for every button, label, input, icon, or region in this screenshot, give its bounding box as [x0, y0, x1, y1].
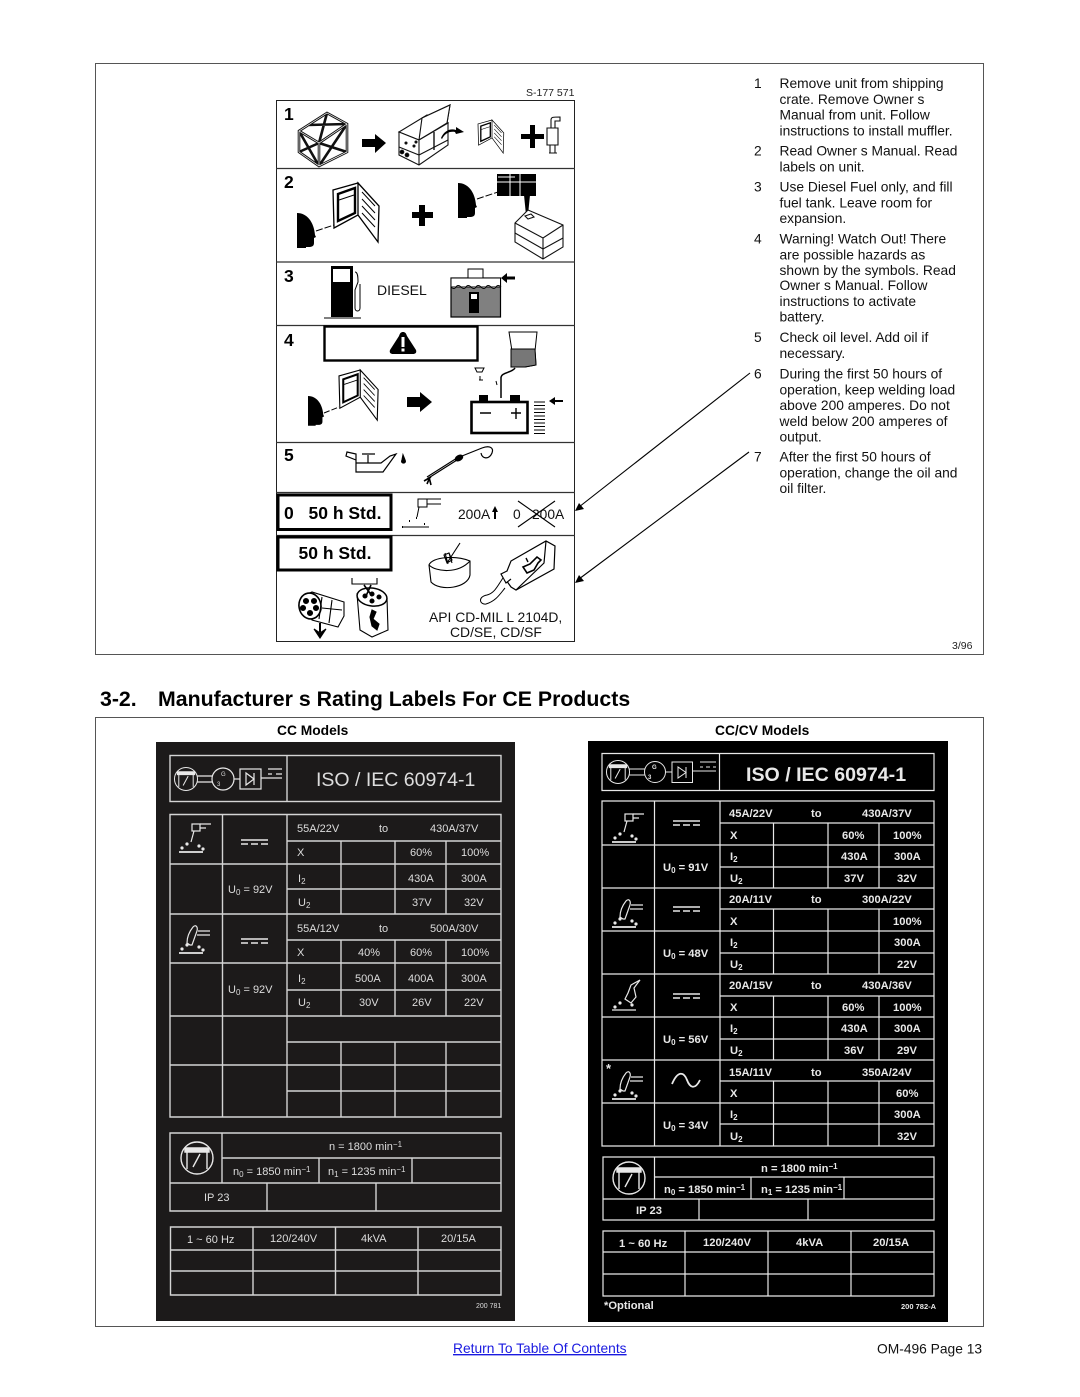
welding data table: 37V [412, 897, 432, 909]
welding data table: 15A/11V [729, 1067, 772, 1079]
welding data table: 0 [671, 1124, 676, 1133]
power supply box: 20/15A [441, 1233, 477, 1245]
welding data table: 100% [461, 947, 489, 959]
power supply box: 20/15A [873, 1237, 909, 1249]
welding data table: 60% [896, 1088, 918, 1100]
welding data table: U [663, 948, 671, 960]
engine speed box: −1 [833, 1183, 843, 1192]
welding data table: U [298, 897, 306, 909]
power supply box: 1 ~ 60 Hz [619, 1238, 668, 1250]
icon: reader head [308, 396, 324, 426]
welding data table: 100% [893, 916, 922, 928]
icon: plus [521, 125, 544, 148]
step 4 pictograms [284, 326, 563, 434]
arrow: step 6 leader [575, 373, 750, 511]
icon: plus [412, 205, 433, 226]
welding data table: 430A/37V [862, 808, 912, 820]
icon: open box unit [399, 105, 450, 165]
welding data table: 2 [738, 963, 743, 972]
welding data table: 300A/22V [862, 894, 912, 906]
text block: numbered steps: Check oil level. Add oil if [780, 330, 928, 345]
icon: engine generator rectifier symbol: G [221, 772, 226, 778]
welding data table: 430A [408, 873, 434, 885]
welding data table: 60% [410, 847, 432, 859]
step 2 pictograms [284, 172, 563, 259]
icon: labels on unit [497, 174, 536, 196]
icon: fuel filter installed [352, 578, 388, 637]
icon: engine generator rectifier symbol: G [652, 765, 657, 771]
step 1 pictograms [284, 104, 560, 166]
welding data table: I [730, 1109, 733, 1121]
welding data table: 430A [841, 1023, 868, 1035]
panel: pictorial instruction table [276, 100, 575, 642]
text block: numbered steps: 5 [754, 330, 762, 345]
welding data table: = 91V [676, 862, 709, 874]
engine speed box: −1 [396, 1165, 406, 1174]
engine speed box: n = 1800 min [761, 1163, 828, 1175]
welding data table: 37V [844, 873, 864, 885]
engine speed box: −1 [828, 1162, 838, 1171]
welding data table: * [606, 1061, 612, 1076]
text block: numbered steps: 7 [754, 450, 762, 464]
header box [170, 755, 501, 802]
welding data table: 300A [894, 1023, 921, 1035]
welding data table: to [379, 823, 388, 835]
step 5 pictograms: 5 [284, 445, 294, 465]
welding data table: = 48V [676, 948, 709, 960]
power supply box: 4kVA [361, 1233, 387, 1245]
welding data table: U [730, 959, 738, 971]
welding data table: 2 [738, 877, 743, 886]
box: 50 h standard [278, 537, 391, 570]
welding data table: 2 [733, 1027, 738, 1036]
text block: numbered steps: instructions to install muffler. [780, 123, 953, 138]
icon: oil can [346, 452, 405, 472]
text block: numbered steps: output. [780, 430, 822, 444]
welding data table: 55A/12V [297, 923, 340, 935]
engine speed box [603, 1157, 934, 1220]
panel: CC models rating label [156, 742, 515, 1321]
part number: 200 782-A [901, 1302, 937, 1311]
welding data table: = 92V [240, 884, 273, 896]
icon: electrolyte bag [475, 332, 537, 398]
text: 0 to 200A crossed out: 0 [513, 507, 521, 522]
text block: numbered steps: Use Diesel Fuel only, and fill [780, 180, 953, 194]
power supply box [603, 1231, 934, 1296]
welding data table: X [297, 847, 305, 859]
engine speed box: n [761, 1184, 768, 1196]
welding data table: 100% [893, 830, 922, 842]
welding data table: 32V [897, 1131, 917, 1143]
welding data table: 300A [461, 973, 487, 985]
engine speed box: −1 [393, 1140, 403, 1149]
welding data table: I [730, 1023, 733, 1035]
engine speed box: = 1235 min [339, 1166, 396, 1178]
engine speed box: 0 [239, 1170, 244, 1179]
text block: numbered steps: weld below 200 amperes of [778, 414, 948, 429]
step 6 first 50 hours pictograms: 0 [284, 503, 294, 523]
engine speed box: −1 [736, 1183, 746, 1192]
welding data table: 350A/24V [862, 1067, 912, 1079]
welding data table: X [730, 1088, 738, 1100]
icon: arrow [407, 392, 432, 412]
welding data table: U [730, 1131, 738, 1143]
text block: numbered steps: necessary. [780, 346, 845, 361]
welding data table: 29V [897, 1045, 917, 1057]
engine speed box: 1 [334, 1170, 339, 1179]
step 3 pictograms: 3 [284, 266, 294, 286]
heading: section 3-2: 3-2. [100, 687, 137, 711]
welding data table: U [228, 984, 236, 996]
power supply box: 120/240V [703, 1237, 751, 1249]
welding data table: 430A/37V [430, 823, 479, 835]
icon: reader head two [458, 183, 477, 218]
text: 0 to 200A crossed out [513, 501, 565, 527]
welding data table: 500A [355, 973, 381, 985]
arrow: step 7 leader [575, 452, 749, 583]
text block: numbered steps: During the first 50 hours of [780, 366, 942, 382]
icon: muffler [547, 117, 560, 153]
text block: numbered steps: instructions to activate [780, 294, 916, 309]
text block: numbered steps: Read Owner s Manual. Read [780, 144, 957, 158]
welding data table: 0 [671, 1038, 676, 1047]
icon: engine generator rectifier symbol [174, 767, 282, 791]
engine speed box: n [328, 1166, 334, 1178]
heading: section 3-2: Manufacturer s Rating Labels For CE Products [158, 687, 630, 711]
optional footnote: *Optional [604, 1300, 654, 1312]
text block: numbered steps: 3 [754, 180, 762, 194]
header box: ISO / IEC 60974-1 [746, 764, 906, 786]
welding data table: I [730, 937, 733, 949]
welding data table: 36V [844, 1045, 864, 1057]
engine speed box: 1 [768, 1188, 773, 1197]
welding data table: 30V [359, 997, 379, 1009]
welding data table: U [730, 873, 738, 885]
welding data table: 2 [733, 1113, 738, 1122]
icon: warning triangle [390, 332, 416, 354]
text block: numbered steps: Remove unit from shipping [780, 76, 944, 91]
icon: fuel pump [324, 266, 361, 318]
text block: numbered steps: are possible hazards as [780, 247, 925, 262]
welding data table: X [730, 830, 738, 842]
step 1 pictograms: 1 [284, 104, 294, 124]
icon: manual [339, 370, 378, 420]
welding data table: 300A [894, 937, 921, 949]
welding data table: 2 [738, 1135, 743, 1144]
page number: OM-496 Page 13 [877, 1342, 982, 1356]
power supply box: 1 ~ 60 Hz [187, 1234, 234, 1246]
icon: manual [478, 120, 504, 153]
step 3 pictograms [284, 266, 515, 318]
text block: numbered steps: labels on unit. [780, 159, 865, 174]
icon: arrow [362, 134, 386, 153]
engine speed box: n [664, 1184, 671, 1196]
text block: numbered steps: 6 [754, 366, 762, 382]
welding data table: U [663, 1034, 671, 1046]
step 6 first 50 hours pictograms: 50 h Std. [308, 503, 381, 523]
welding data table: 22V [897, 959, 917, 971]
text block: numbered steps: 1 [754, 76, 762, 91]
engine speed box: IP 23 [204, 1192, 230, 1204]
welding data table: U [730, 1045, 738, 1057]
icon: welding torch [402, 499, 441, 527]
welding data table: 2 [301, 877, 306, 886]
welding data table: 100% [893, 1002, 922, 1014]
welding data table: X [730, 916, 738, 928]
welding data table: I [298, 873, 301, 885]
icon: crate [299, 113, 347, 166]
welding data table: 2 [733, 855, 738, 864]
box: 0 to 50 h standard [278, 495, 391, 530]
welding data table: 32V [464, 897, 484, 909]
step 7 first 50 hours pictograms: 50 h Std. [298, 543, 371, 563]
icon: manual [333, 183, 379, 242]
text block: numbered steps: Owner s Manual. Follow [780, 278, 928, 293]
step 4 pictograms: 4 [284, 330, 294, 350]
power supply box [170, 1227, 501, 1295]
welding data table: 430A/36V [862, 980, 912, 992]
welding data table: 20A/11V [729, 894, 772, 906]
oil specification: API CD-MIL L 2104D, [429, 609, 562, 625]
text block: numbered steps: battery. [780, 310, 824, 325]
welding data table: 26V [412, 997, 432, 1009]
text block: numbered steps: crate. Remove Owner s [780, 92, 925, 107]
step 7 first 50 hours pictograms [278, 537, 562, 640]
welding data table: = 92V [240, 984, 273, 996]
warning banner [324, 326, 478, 360]
date code: 3/96 [952, 640, 973, 652]
icon: fuel tank [451, 269, 515, 317]
welding data table: U [663, 1120, 671, 1132]
text block: numbered steps: oil filter. [780, 481, 826, 496]
icon: engine generator rectifier symbol: 3 [648, 775, 652, 781]
welding data table: 40% [358, 947, 380, 959]
engine speed box: IP 23 [636, 1205, 662, 1217]
text block: numbered steps: fuel tank. Leave room for [780, 195, 933, 210]
panel: CE rating labels frame [96, 718, 984, 1326]
header box: ISO / IEC 60974-1 [316, 769, 475, 791]
step 6 first 50 hours pictograms [278, 495, 565, 530]
icon: dipstick [424, 447, 493, 485]
text: 200A minimum: 200A [458, 507, 491, 522]
welding data table: 32V [897, 873, 917, 885]
welding data table: X [297, 947, 305, 959]
engine speed box: n = 1800 min [329, 1141, 393, 1153]
text block: numbered steps: Warning! Watch Out! There [780, 232, 946, 246]
power supply box: 4kVA [796, 1237, 823, 1249]
part number: 200 781 [476, 1303, 501, 1310]
power supply box: 120/240V [270, 1233, 318, 1245]
engine speed box: 0 [671, 1188, 676, 1197]
icon: fuel filter removed [297, 591, 344, 638]
welding data table: I [730, 851, 733, 863]
text block: numbered steps: above 200 amperes. Do not [780, 398, 950, 413]
text block: numbered steps: expansion. [780, 211, 846, 226]
welding data table: 100% [461, 847, 489, 859]
welding data table: 60% [842, 830, 864, 842]
welding data table: 45A/22V [729, 808, 773, 820]
welding data table: U [298, 997, 306, 1009]
link: return to table of contents: Return To Table Of Contents [453, 1341, 627, 1356]
welding data table: 60% [410, 947, 432, 959]
welding data table: 2 [733, 941, 738, 950]
text block: numbered steps: Manual from unit. Follow [780, 108, 930, 123]
icon: reader head [297, 213, 316, 248]
engine speed box: n [233, 1166, 239, 1178]
text: 0 to 200A crossed out: 200A [532, 507, 565, 522]
header box [602, 753, 934, 791]
text block: numbered steps: shown by the symbols. Read [780, 263, 956, 278]
welding data table: 430A [841, 851, 868, 863]
text block: numbered steps: operation, keep welding load [780, 382, 955, 397]
text block: numbered steps: 2 [754, 144, 762, 158]
icon: up arrow [492, 506, 498, 519]
icon: oil bottle [480, 541, 555, 604]
welding data table: to [811, 808, 822, 820]
welding data table [170, 814, 501, 1117]
oil specification: CD/SE, CD/SF [450, 624, 542, 640]
heading: CC/CV models: CC/CV Models [715, 723, 810, 738]
welding data table: 2 [301, 977, 306, 986]
welding data table: 2 [306, 901, 311, 910]
engine speed box: = 1850 min [244, 1166, 301, 1178]
welding data table: = 34V [676, 1120, 709, 1132]
welding data table: X [730, 1002, 738, 1014]
welding data table: to [811, 1067, 822, 1079]
icon: battery [472, 395, 563, 434]
welding data table: 2 [738, 1049, 743, 1058]
welding data table: = 56V [676, 1034, 709, 1046]
welding data table: 0 [236, 988, 241, 997]
welding data table: to [811, 894, 822, 906]
panel: startup steps frame [96, 64, 984, 654]
oil specification [429, 609, 562, 640]
heading: CC models: CC Models [277, 723, 349, 738]
welding data table: to [379, 923, 388, 935]
welding data table: 20A/15V [729, 980, 773, 992]
welding data table: 400A [408, 973, 434, 985]
engine speed box: = 1850 min [675, 1184, 736, 1196]
welding data table: 0 [236, 888, 241, 897]
panel: CC/CV models rating label [588, 741, 948, 1322]
icon: engine generator rectifier symbol [606, 760, 716, 784]
welding data table: 0 [671, 866, 676, 875]
text block: numbered steps: operation, change the oil and [780, 465, 957, 480]
welding data table: 300A [461, 873, 487, 885]
welding data table: U [228, 884, 236, 896]
welding data table: 0 [671, 952, 676, 961]
text block: numbered steps [754, 76, 957, 496]
welding data table: 300A [894, 1109, 921, 1121]
welding data table: 55A/22V [297, 823, 340, 835]
engine speed box: −1 [301, 1165, 311, 1174]
engine speed box [170, 1133, 501, 1211]
step 2 pictograms: 2 [284, 172, 294, 192]
engine speed box: = 1235 min [772, 1184, 833, 1196]
step 5 pictograms [284, 445, 493, 485]
icon: engine generator rectifier symbol: 3 [217, 782, 221, 788]
welding data table [602, 801, 934, 1146]
text block: numbered steps: 4 [754, 232, 762, 246]
welding data table: 22V [464, 997, 484, 1009]
welding data table: I [298, 973, 301, 985]
text block: numbered steps: After the first 50 hours of [780, 450, 931, 464]
drawing reference number: S-177 571 [526, 87, 575, 99]
welding data table: 300A [894, 851, 921, 863]
welding data table: to [811, 980, 822, 992]
welding data table: 500A/30V [430, 923, 479, 935]
icon: oil pan [429, 543, 470, 588]
welding data table: 60% [842, 1002, 864, 1014]
welding data table: 2 [306, 1001, 311, 1010]
welding data table: U [663, 862, 671, 874]
diesel label: DIESEL [377, 282, 427, 298]
